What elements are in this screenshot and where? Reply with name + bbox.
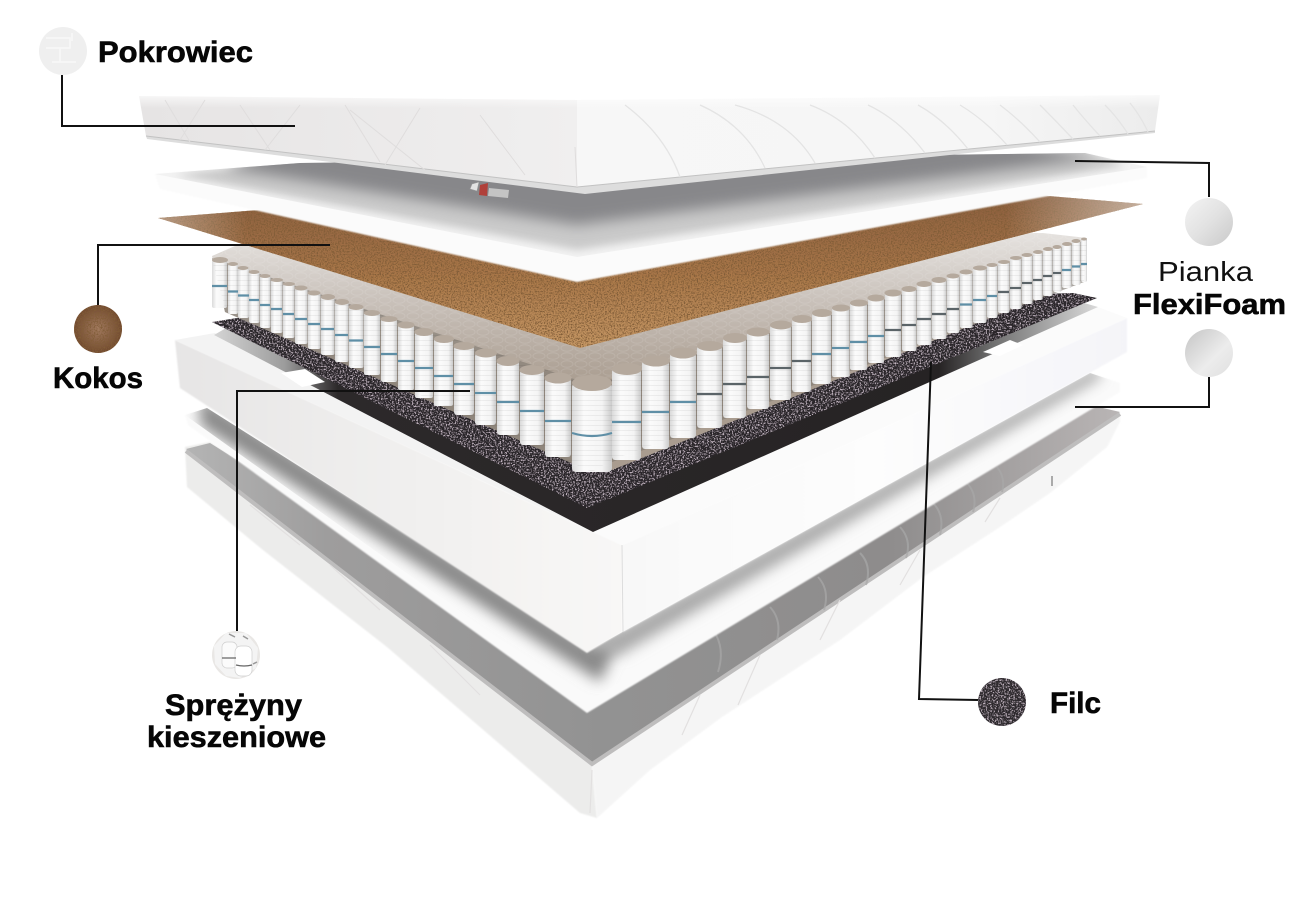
layer: upper foam: [155, 140, 1147, 282]
seams on lower side: [250, 498, 1000, 813]
callout line: Filc: [919, 362, 978, 700]
icon: pocket springs: [212, 631, 260, 679]
quilting seams: [625, 103, 1148, 177]
icon: foam lower: [1185, 329, 1233, 377]
spring ridges: [212, 239, 1087, 472]
heading: Pokrowiec: Pokrowiec: [98, 36, 253, 69]
callout line: lower foam: [1075, 377, 1209, 407]
label: Filc: Filc: [1050, 687, 1101, 720]
layer: foam frame: [175, 296, 1127, 653]
callout line: upper foam: [1075, 161, 1209, 197]
icon: coconut fibre: [74, 305, 122, 353]
layer: pocket springs: [212, 233, 1087, 472]
spring bands: dark: [697, 273, 1061, 394]
icon: cover texture: [39, 27, 87, 75]
callout line: Pokrowiec: [62, 75, 295, 126]
label: Kokos: Kokos: [53, 362, 143, 395]
spring bands: blue: [212, 264, 1087, 436]
layer: coconut mat: [158, 195, 1143, 348]
frame slot: right: [983, 340, 1023, 356]
callout line: Kokos: [98, 245, 330, 305]
mattress exploded illustration: [135, 90, 1165, 818]
label: Pianka FlexiFoam: [1133, 256, 1286, 321]
label: Pianka FlexiFoam: FlexiFoam: [1133, 289, 1286, 321]
layer: top cover: [135, 90, 1165, 198]
icon: felt: [978, 678, 1026, 726]
layer: lower foam: [185, 365, 1120, 713]
icon: foam upper: [1185, 198, 1233, 246]
label: Sprężyny kieszeniowe: [147, 689, 326, 754]
label: Sprężyny kieszeniowe: Sprężyny: [165, 689, 302, 722]
callout line: Sprężyny: [237, 391, 470, 631]
label: Sprężyny kieszeniowe: kieszeniowe: [147, 721, 326, 754]
layer: felt: [212, 293, 1097, 508]
brand tag: [470, 182, 509, 198]
spring block top: [212, 233, 1087, 472]
frame slot: left: [281, 369, 325, 387]
label: Pianka FlexiFoam: Pianka: [1158, 256, 1253, 287]
seams on grey top: [715, 467, 1003, 672]
layer: bottom cover: [185, 405, 1120, 818]
